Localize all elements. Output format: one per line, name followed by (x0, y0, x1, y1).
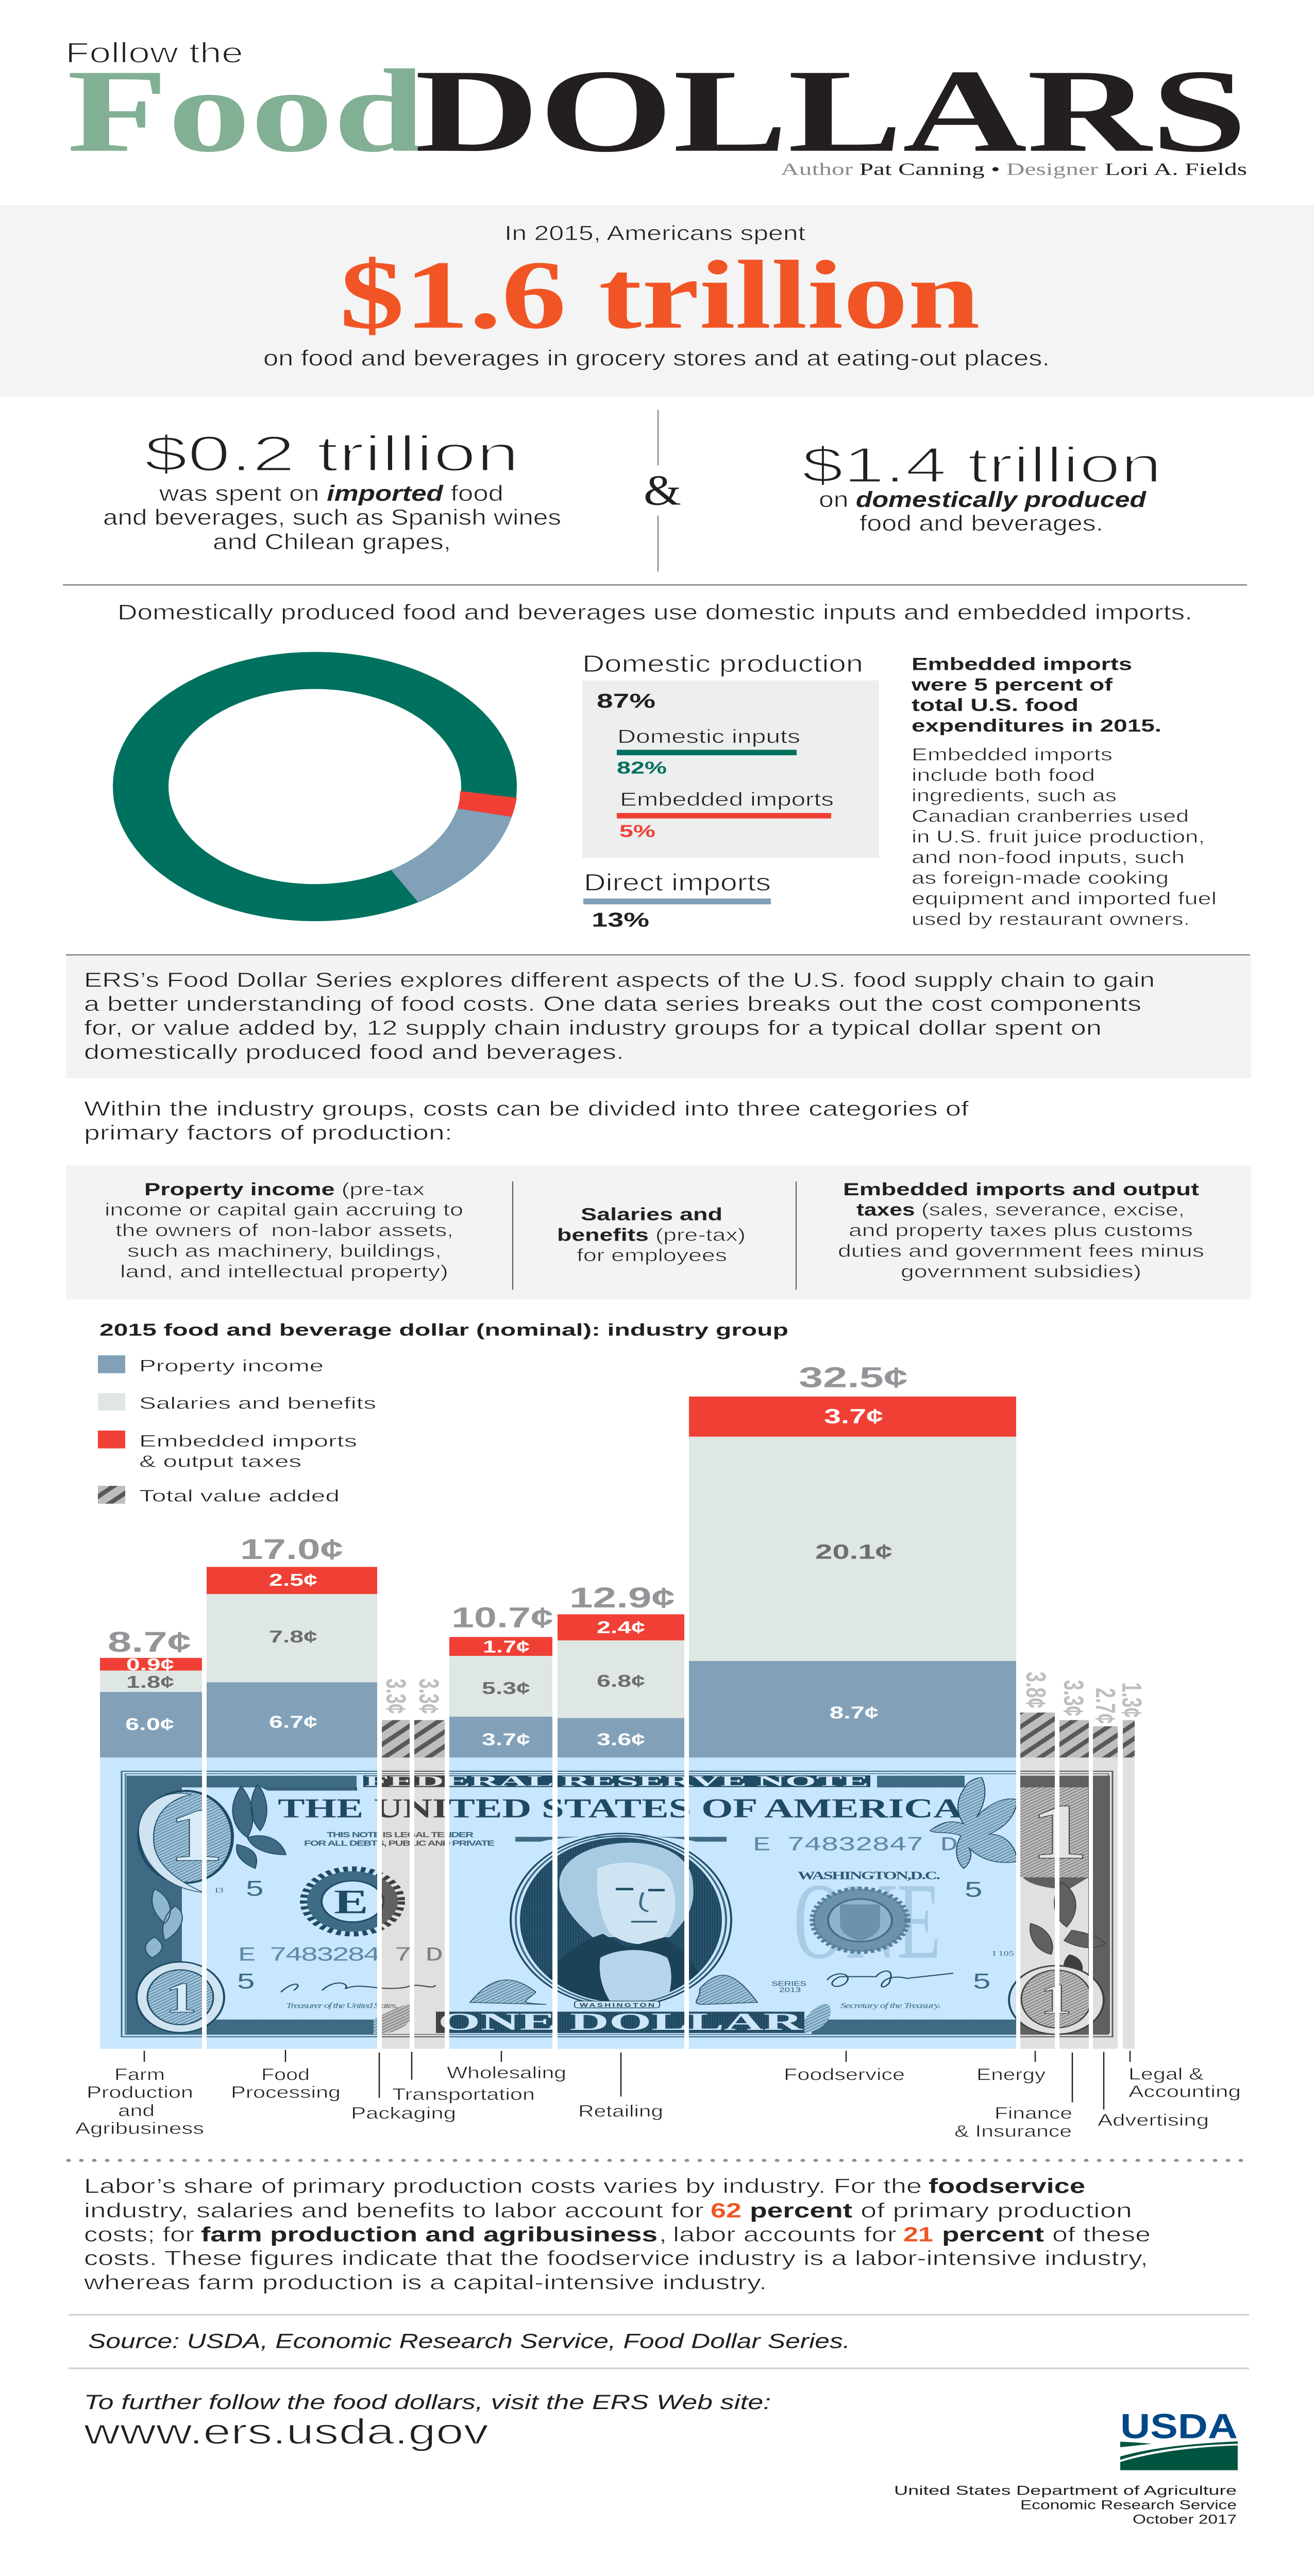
bar: farm production and agribusiness: 6.0¢ (125, 1715, 174, 1734)
text block: labor share: 21 (903, 2223, 933, 2246)
text block: three categories (84, 1097, 969, 1144)
title word: DOLLARS: DOLLARS (415, 45, 1247, 177)
treasurer signature: Treasurer of the United States. (286, 2002, 398, 2010)
title word: Food: Food (67, 45, 425, 177)
category: property income: Property income (pre-tax (144, 1179, 425, 1199)
text block: three categories: Within the industry groups, costs can be divided into three categories of (84, 1097, 969, 1120)
dollar bill illustration: ONE (794, 1861, 941, 1981)
bar: retailing: 3.6¢ (597, 1730, 645, 1749)
value: 3.3 cents: 3.3¢ (1058, 1680, 1089, 1716)
bar: legal and accounting (1116, 1682, 1148, 1757)
industry label: legal and accounting: Accounting (1128, 2082, 1241, 2101)
panel: domestic spending (802, 437, 1162, 535)
website address: www.ers.usda.gov (83, 2412, 488, 2451)
desaturated bill columns (382, 1757, 1135, 2049)
panel: ERS food dollar series (66, 954, 1251, 1078)
text block: labor share: Labor’s share of primary production costs varies by industry. For the (84, 2175, 922, 2197)
icon: USDA logo: USDA (1120, 2407, 1238, 2446)
left engraving (126, 1776, 374, 2034)
bar: domestic inputs (617, 750, 797, 755)
text block: labor share: foodservice (929, 2175, 1085, 2197)
industry label: farm production (75, 2051, 204, 2138)
Washington DC and series text (771, 1869, 953, 2010)
text block: labor share: percent (942, 2223, 1044, 2246)
call to action: To further follow the food dollars, visit the ERS Web site: (84, 2391, 771, 2414)
legal tender text: FOR ALL DEBTS, PUBLIC AND PRIVATE (304, 1839, 495, 1848)
text block: labor share: percent (750, 2199, 852, 2222)
donut chart (141, 670, 517, 903)
gray box (582, 681, 879, 858)
industry label: transportation: Transportation (392, 2084, 535, 2104)
category: property income (105, 1179, 463, 1281)
bar: wholesaling (449, 1601, 553, 1757)
legend: Salaries and benefits (139, 1394, 376, 1413)
bar: retailing (558, 1582, 684, 1757)
bar: energy (1020, 1672, 1055, 1757)
footer credits: Economic Research Service (1020, 2498, 1237, 2512)
text block: embedded imports: expenditures in 2015. (912, 716, 1161, 736)
domestic description line 2: food and beverages. (860, 511, 1103, 535)
dollar bill illustration (100, 1757, 1135, 2049)
category: embedded imports (838, 1179, 1204, 1281)
values: 2.5¢ (269, 1571, 317, 1590)
industry label: food processing: Food (261, 2065, 310, 2083)
category: salaries (557, 1205, 746, 1265)
title (65, 37, 1247, 179)
legend (98, 1355, 376, 1505)
category: embedded imports: and property taxes plus customs (849, 1221, 1193, 1240)
bar: embedded imports (617, 813, 831, 819)
intro text: In 2015, Americans spent (504, 222, 805, 245)
industry label: legal and accounting (1128, 2051, 1241, 2101)
serial numbers and plate marks: 5 (246, 1876, 263, 1901)
industry label: finance and insurance: Finance (995, 2104, 1072, 2123)
value: 3.3 cents: 3.3¢ (413, 1679, 445, 1714)
footer credits: October 2017 (1133, 2512, 1237, 2527)
category: property income: such as machinery, buildings, (127, 1241, 442, 1261)
imported description line 2: and beverages, such as Spanish wines (103, 505, 561, 530)
industry label: advertising: Advertising (1098, 2110, 1209, 2129)
text block: embedded imports: ingredients, such as (912, 786, 1117, 805)
value: 1.3 cents: 1.3¢ (1116, 1682, 1148, 1718)
industry label: packaging: Packaging (351, 2104, 456, 2123)
serial numbers and plate marks: I 105 (992, 1950, 1014, 1957)
industry label: food processing (231, 2050, 341, 2102)
industry label: farm production: Production (87, 2082, 193, 2102)
industry label: finance and insurance: & Insurance (954, 2122, 1072, 2140)
value: 13%: 13% (592, 909, 649, 931)
text block: embedded imports: in U.S. fruit juice production, (912, 827, 1205, 846)
left engraving: 1 (165, 1974, 197, 2021)
Washington DC and series text: WASHINGTON,D.C. (798, 1869, 940, 1882)
industry label: farm production: Agribusiness (75, 2119, 204, 2138)
legend: & output taxes (139, 1452, 301, 1470)
text block: embedded imports: and non-food inputs, such (912, 848, 1185, 867)
label: direct imports: Direct imports (584, 869, 771, 896)
bottom band: one dollar: ONE DOLLAR (438, 2008, 803, 2036)
footer credits: United States Department of Agriculture (894, 2483, 1237, 2498)
category: salaries: benefits (pre-tax) (557, 1225, 746, 1245)
text block: embedded imports: as foreign-made cooking (912, 868, 1169, 888)
panel: ERS food dollar series: a better understanding of food costs. One data series breaks out the cost components (84, 992, 1141, 1015)
bar: foodservice: 20.1¢ (815, 1540, 892, 1563)
chart title: 2015 food and beverage dollar (nominal): industry group (99, 1321, 788, 1340)
serial numbers and plate marks: 5 (965, 1877, 982, 1902)
industry label: legal and accounting: Legal & (1128, 2064, 1204, 2083)
serial numbers and plate marks: E 74832847 D (753, 1834, 958, 1856)
footer credits (894, 2483, 1237, 2527)
text block: labor share (83, 2175, 1151, 2294)
bar: wholesaling: 3.7¢ (482, 1730, 530, 1749)
bar: transportation (413, 1679, 445, 1757)
banner: federal reserve note (363, 1773, 965, 1789)
label: embedded imports: Embedded imports (620, 789, 834, 810)
federal reserve seal (304, 1869, 401, 1934)
bar: direct imports (583, 899, 771, 904)
panel: imported spending (103, 426, 561, 554)
bottom band: one dollar (374, 2004, 1018, 2036)
serial numbers and plate marks: E 7483284 7 D (238, 1944, 443, 1967)
amount: $0.2 trillion: $0.2 trillion (144, 426, 519, 482)
donut slice: embedded imports (458, 791, 517, 817)
imported description: was spent on imported food (159, 481, 503, 505)
values: 0.9¢ (126, 1655, 174, 1674)
source note: Source: USDA, Economic Research Service, Food Dollar Series. (88, 2329, 850, 2352)
value: 5%: 5% (619, 822, 655, 841)
total: 10.7 cents: 10.7¢ (451, 1601, 553, 1634)
panel: factor categories (66, 1165, 1251, 1299)
text block: labor share: labor accounts for (673, 2223, 897, 2246)
sub text: on food and beverages in grocery stores and at eating-out places. (263, 346, 1050, 370)
category: embedded imports: government subsidies) (901, 1262, 1141, 1281)
Washington DC and series text: SERIES (771, 1980, 806, 1988)
category: property income: income or capital gain accruing to (105, 1200, 463, 1219)
value: 3.8 cents: 3.8¢ (1020, 1672, 1052, 1708)
back of bill engraving (1009, 1776, 1110, 2035)
bar: wholesaling: 5.3¢ (482, 1679, 530, 1698)
values: 1.7¢ (483, 1637, 530, 1656)
bar: retailing: 6.8¢ (597, 1672, 645, 1691)
treasurer signature (281, 1983, 435, 2010)
legend: Embedded imports (139, 1431, 357, 1450)
bar: packaging (380, 1679, 412, 1757)
total: 32.5 cents: 32.5¢ (799, 1361, 908, 1394)
text block: labor share: whereas farm production is a capital-intensive industry. (83, 2270, 767, 2294)
donut slice: direct imports (391, 808, 512, 902)
bar: food processing: 7.8¢ (269, 1628, 317, 1647)
industry label: wholesaling: Wholesaling (447, 2063, 566, 2082)
category: embedded imports: taxes (sales, severance, excise, (856, 1200, 1185, 1219)
bill heading: THE UNITED STATES OF AMERICA (278, 1792, 963, 1823)
industry label: farm production: Farm (114, 2065, 165, 2083)
heading: domestic production: Domestic production (582, 650, 863, 677)
text block: embedded imports: include both food (912, 765, 1095, 785)
industry label: energy (976, 2051, 1046, 2083)
text block: embedded imports: used by restaurant owners. (912, 909, 1190, 929)
federal reserve seal: E (334, 1883, 368, 1921)
value: 2.7 cents: 2.7¢ (1090, 1688, 1121, 1724)
left engraving: 1 (167, 1793, 224, 1877)
text block: embedded imports (911, 654, 1217, 929)
title kicker: Follow the (65, 37, 243, 69)
bar: farm production and agribusiness: 1.8¢ (126, 1673, 174, 1692)
industry label: energy: Energy (976, 2065, 1046, 2083)
text block: labor share: industry, salaries and benefits to labor account for (84, 2199, 704, 2222)
industry label: farm production: and (118, 2101, 155, 2120)
bar: food processing (207, 1533, 377, 1757)
headline number: $1.6 trillion (340, 241, 980, 349)
value: 87%: 87% (597, 690, 655, 712)
panel: ERS food dollar series: ERS’s Food Dollar Series explores different aspects of the U.S. food supply chain to gain (84, 968, 1155, 991)
value: 82%: 82% (617, 758, 667, 777)
legend: Total value added (139, 1486, 340, 1505)
panel: production legend (582, 650, 879, 931)
bar: advertising (1090, 1688, 1121, 1757)
serial numbers and plate marks: 5 (237, 1969, 255, 1993)
category: salaries: for employees (577, 1245, 727, 1265)
Washington DC and series text: 2013 (779, 1987, 801, 1994)
imported description line 3: and Chilean grapes, (213, 530, 451, 554)
legend: Property income (139, 1356, 324, 1375)
back of bill engraving: 1 (1040, 1975, 1072, 2023)
credits: Author Pat Canning • Designer Lori A. Fields (781, 160, 1247, 179)
domestic description: on domestically produced (819, 487, 1147, 512)
total: 17.0 cents: 17.0¢ (240, 1533, 343, 1566)
text block: embedded imports: Embedded imports (912, 744, 1113, 765)
text block: embedded imports: were 5 percent of (911, 675, 1113, 695)
call to action (83, 2391, 771, 2451)
portrait of Washington: WASHINGTON (580, 2002, 654, 2008)
category: embedded imports: duties and government fees minus (838, 1241, 1204, 1261)
panel: ERS food dollar series: domestically produced food and beverages. (84, 1040, 624, 1063)
treasury seal and watermark (794, 1861, 941, 1981)
panel: total spending (0, 205, 1314, 397)
text block: labor share: , (659, 2223, 667, 2246)
label: domestic inputs: Domestic inputs (617, 726, 800, 748)
category: salaries: Salaries and (581, 1205, 722, 1225)
text block: three categories: primary factors of production: (84, 1121, 452, 1144)
bar: farm production and agribusiness (100, 1626, 202, 1757)
Washington DC and series text: Secretary of the Treasury. (840, 2002, 941, 2010)
bar: finance and insurance (1058, 1680, 1089, 1757)
serial numbers and plate marks: I3 (215, 1887, 224, 1894)
amount: $1.4 trillion: $1.4 trillion (802, 437, 1162, 493)
text block: labor share: farm production and agribusiness (201, 2223, 658, 2246)
back of bill engraving: 1 (1030, 1788, 1089, 1875)
legal tender text (304, 1831, 495, 1848)
ampersand: & (644, 466, 681, 514)
values: 3.7¢ (824, 1405, 883, 1428)
text block: labor share: costs; for (84, 2223, 194, 2246)
text block: labor share: of primary production (861, 2199, 1132, 2222)
bar: foodservice: 8.7¢ (830, 1703, 879, 1722)
total: 12.9 cents: 12.9¢ (569, 1582, 675, 1614)
serial numbers and plate marks (215, 1834, 1014, 1993)
legal tender text: THIS NOTE IS LEGAL TENDER (327, 1831, 474, 1839)
text block: embedded imports: equipment and imported fuel (912, 889, 1217, 908)
right leaf ornament (930, 1777, 1018, 1869)
portrait of Washington (470, 1834, 757, 2008)
category: property income: the owners of non-labor assets, (115, 1221, 453, 1240)
values: 2.4¢ (597, 1618, 645, 1637)
icon: USDA logo (1120, 2407, 1238, 2470)
category: property income: land, and intellectual property) (120, 1262, 448, 1281)
text block: labor share: of these (1052, 2223, 1151, 2246)
serial numbers and plate marks: 5 (973, 1969, 990, 1993)
panel: ERS food dollar series: for, or value added by, 12 supply chain industry groups for a typical dollar spent on (84, 1016, 1102, 1039)
text block: labor share: costs. These figures indicate that the foodservice industry is a labor-intensive industry, (84, 2247, 1148, 2269)
text block: embedded imports: Canadian cranberries used (912, 806, 1189, 826)
industry label: food processing: Processing (231, 2082, 341, 2102)
bill column gaps (202, 1757, 1123, 2050)
text block: embedded imports: total U.S. food (912, 695, 1079, 715)
banner: federal reserve note: FEDERAL RESERVE NOTE (365, 1773, 869, 1789)
industry label: retailing: Retailing (578, 2102, 663, 2121)
value: 3.3 cents: 3.3¢ (380, 1679, 412, 1714)
text block: labor share: 62 (711, 2199, 742, 2222)
bar: foodservice (689, 1361, 1016, 1757)
category: embedded imports: Embedded imports and output (843, 1179, 1199, 1199)
industry label: foodservice: Foodservice (784, 2065, 905, 2083)
industry label: finance and insurance (954, 2053, 1072, 2140)
bar: food processing: 6.7¢ (269, 1713, 317, 1732)
text block: embedded imports: Embedded imports (912, 654, 1132, 674)
total: 8.7 cents: 8.7¢ (108, 1626, 191, 1658)
